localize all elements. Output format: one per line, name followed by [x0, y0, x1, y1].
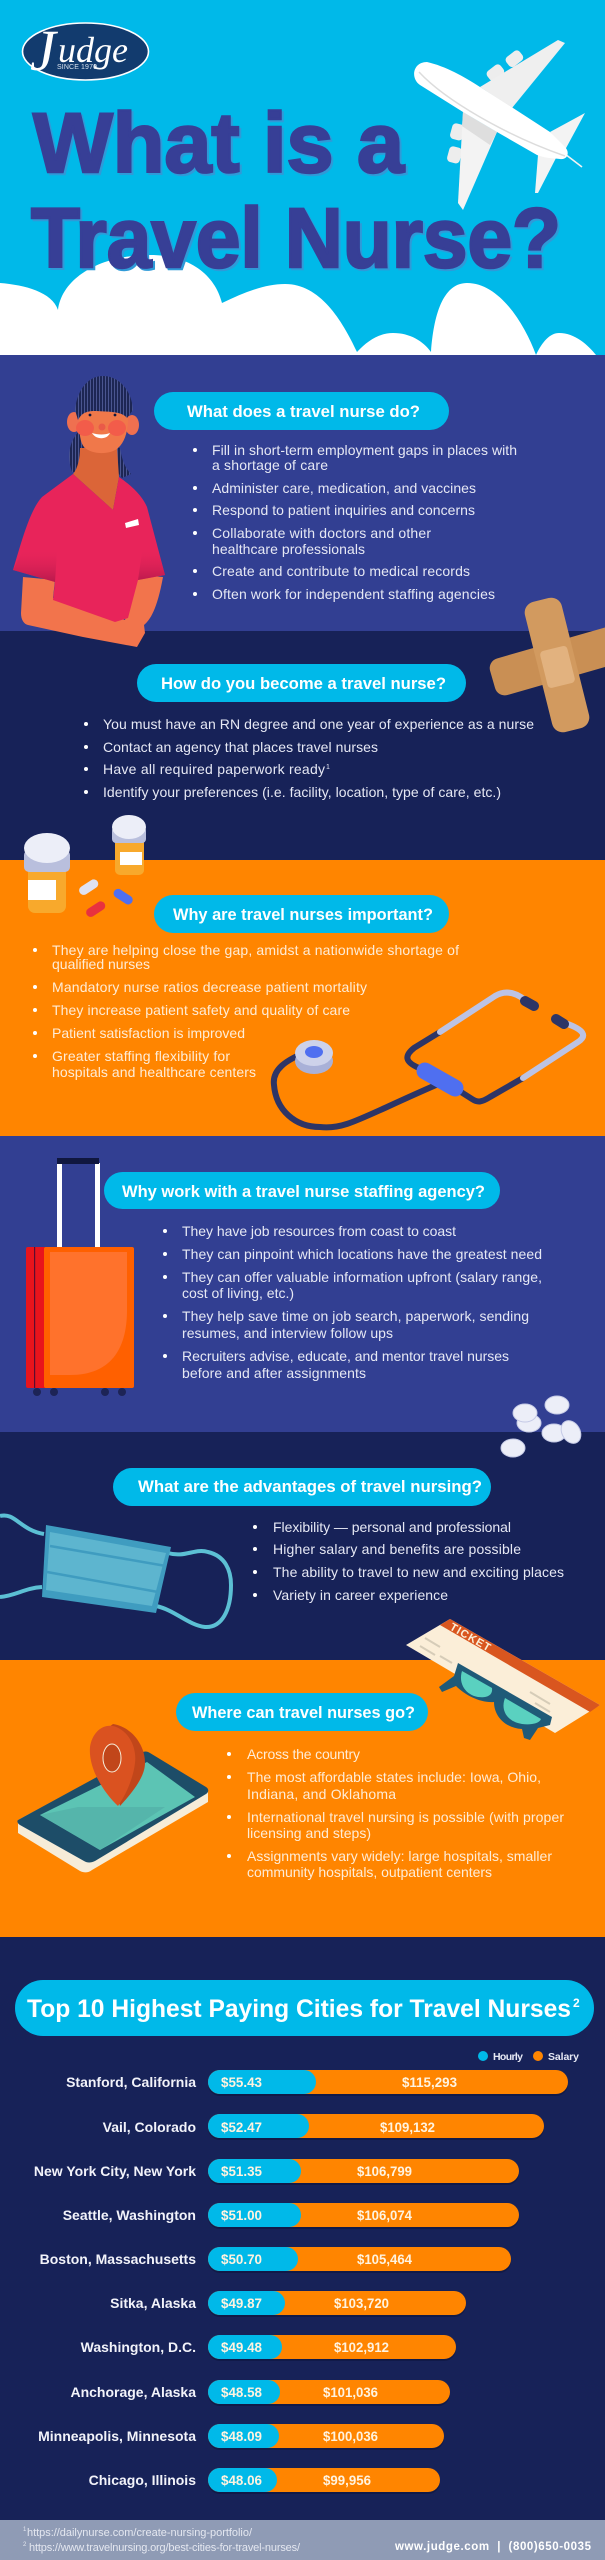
row: Seattle — [63, 2203, 519, 2229]
panel: why work with a staffing agency — [0, 1136, 605, 1432]
bullet list: licensing and steps) — [247, 1825, 371, 1841]
bullet list: community hospitals, outpatient centers — [247, 1864, 492, 1880]
logo: SINCE 1970 — [57, 64, 97, 71]
icon: pill bottles and capsules — [24, 815, 146, 919]
icon: surgical mask — [0, 1515, 231, 1627]
heading: What are the advantages of travel nursing? — [138, 1477, 482, 1496]
row: Stanford — [66, 2070, 568, 2096]
panel: advantages of travel nursing — [0, 1432, 605, 1660]
bullet list: They increase patient safety and quality of care — [52, 1002, 350, 1018]
footnotes: 2 — [23, 2542, 27, 2548]
footnotes — [23, 2527, 301, 2554]
title — [31, 96, 563, 287]
row: Vail: $52.47 — [221, 2120, 262, 2135]
heading: What does a travel nurse do? — [187, 402, 420, 421]
row: Minneapolis — [38, 2424, 444, 2450]
heading — [154, 895, 449, 933]
bullet list — [33, 942, 459, 1080]
row: Boston — [40, 2247, 511, 2273]
row: Washington DC — [81, 2335, 456, 2361]
icon: ticket and sunglasses: TICKET — [448, 1621, 493, 1654]
row: Anchorage: Anchorage, Alaska — [70, 2384, 196, 2400]
heading: How do you become a travel nurse? — [161, 674, 446, 693]
bullet list: Patient satisfaction is improved — [52, 1025, 245, 1041]
logo — [22, 18, 148, 83]
row: Boston: Boston, Massachusetts — [40, 2251, 196, 2267]
bullet list: Flexibility — personal and professional — [273, 1519, 511, 1535]
row: New York City: $51.35 — [221, 2164, 262, 2179]
row: Seattle: $106,074 — [357, 2208, 412, 2223]
heading: Top 10 Highest Paying Cities for Travel Nurses — [27, 1995, 571, 2023]
icon: stethoscope — [274, 993, 583, 1127]
bullet list: hospitals and healthcare centers — [52, 1064, 256, 1080]
bullet list: They can pinpoint which locations have the greatest need — [182, 1246, 542, 1262]
row: New York City: New York City, New York — [34, 2163, 196, 2179]
icon: ticket and sunglasses — [406, 1619, 600, 1740]
legend — [478, 2051, 579, 2063]
bullet list — [193, 442, 517, 602]
clouds — [0, 255, 596, 355]
row: Boston: $50.70 — [221, 2252, 262, 2267]
row: Anchorage: $101,036 — [323, 2385, 378, 2400]
bullet list: They have job resources from coast to coast — [182, 1223, 456, 1239]
bullet list: healthcare professionals — [212, 541, 365, 557]
bullet list: Recruiters advise, educate, and mentor travel nurses — [182, 1348, 509, 1364]
bullet list — [84, 716, 534, 800]
title: What is a — [33, 96, 405, 190]
bullet list: They are helping close the gap, amidst a nationwide shortage of — [52, 942, 459, 958]
bullet list: The most affordable states include: Iowa, Ohio, — [247, 1769, 541, 1785]
row: Anchorage — [70, 2380, 450, 2406]
row: Seattle: Seattle, Washington — [63, 2207, 196, 2223]
panel: what does a travel nurse do — [0, 355, 605, 631]
bullet list: resumes, and interview follow ups — [182, 1325, 393, 1341]
bullet list: Fill in short-term employment gaps in places with — [212, 442, 517, 458]
row: Minneapolis: Minneapolis, Minnesota — [38, 2428, 196, 2444]
row: Washington DC: $49.48 — [221, 2340, 262, 2355]
icon: tablets — [501, 1396, 585, 1457]
bullet list — [163, 1223, 542, 1381]
contact line: www.judge.com | (800)650-0035 — [394, 2541, 592, 2553]
bullet list: Create and contribute to medical records — [212, 563, 470, 579]
legend: Hourly — [493, 2051, 523, 2063]
heading: 2 — [573, 1996, 580, 2010]
bullet list: 1 — [326, 764, 330, 771]
panel: why are travel nurses important — [0, 860, 605, 1136]
title: Travel Nurse? — [31, 191, 561, 285]
heading — [113, 1468, 491, 1506]
bullet list: They can offer valuable information upfront (salary range, — [182, 1269, 542, 1285]
row: Vail — [103, 2114, 544, 2140]
row: Minneapolis: $100,036 — [323, 2429, 378, 2444]
icon: crossed bandages — [487, 595, 605, 735]
title: Travel Nurse? — [33, 193, 563, 287]
panel: where can travel nurses go — [0, 1660, 605, 1937]
row: Chicago — [89, 2468, 440, 2494]
bullet list: Greater staffing flexibility for — [52, 1048, 230, 1064]
footnotes: https://dailynurse.com/create-nursing-portfolio/ — [27, 2527, 253, 2539]
bullet list — [253, 1519, 564, 1603]
row: Vail: Vail, Colorado — [103, 2119, 196, 2135]
bullet list: Mandatory nurse ratios decrease patient mortality — [52, 979, 367, 995]
bullet list: Assignments vary widely: large hospitals, smaller — [247, 1848, 552, 1864]
bullet list: International travel nursing is possible (with proper — [247, 1809, 564, 1825]
bullet list: qualified nurses — [52, 956, 150, 972]
row: Vail: $109,132 — [380, 2120, 435, 2135]
bullet list: a shortage of care — [212, 457, 328, 473]
row: Chicago: $48.06 — [221, 2473, 262, 2488]
bullet list: Indiana, and Oklahoma — [247, 1786, 396, 1802]
bullet list — [227, 1746, 564, 1880]
row: Sitka: $103,720 — [334, 2296, 389, 2311]
bullet list: Collaborate with doctors and other — [212, 525, 431, 541]
panel: top 10 highest paying cities — [0, 1937, 605, 2520]
row: Sitka: Sitka, Alaska — [110, 2295, 196, 2311]
footer — [0, 2520, 605, 2560]
row: Stanford: Stanford, California — [66, 2074, 196, 2090]
heading: Where can travel nurses go? — [192, 1703, 415, 1722]
bullet list: Across the country — [247, 1746, 360, 1762]
heading: Why are travel nurses important? — [173, 905, 433, 924]
bullet list: Administer care, medication, and vaccines — [212, 480, 476, 496]
bullet list: before and after assignments — [182, 1365, 366, 1381]
logo: udge — [58, 30, 128, 70]
title: What is a — [35, 98, 407, 192]
row: Chicago: $99,956 — [323, 2473, 371, 2488]
logo: J — [30, 18, 59, 83]
bullet list: Often work for independent staffing agencies — [212, 586, 495, 602]
row: Washington DC: Washington, D.C. — [81, 2339, 196, 2355]
bullet list: The ability to travel to new and exciting places — [273, 1564, 564, 1580]
icon: nurse — [13, 376, 165, 647]
row: Seattle: $51.00 — [221, 2208, 262, 2223]
row: Stanford: $115,293 — [402, 2075, 457, 2090]
row: New York City — [34, 2159, 519, 2185]
row: Chicago: Chicago, Illinois — [89, 2472, 196, 2488]
row: Washington DC: $102,912 — [334, 2340, 389, 2355]
row: Stanford: $55.43 — [221, 2075, 262, 2090]
footnotes: 1 — [23, 2527, 27, 2533]
icon: phone with map pin — [17, 1724, 208, 1872]
bullet list: Higher salary and benefits are possible — [273, 1541, 521, 1557]
bullet list: cost of living, etc.) — [182, 1285, 294, 1301]
heading — [104, 1172, 500, 1209]
bullet list: Respond to patient inquiries and concerns — [212, 502, 475, 518]
heading — [15, 1980, 594, 2036]
bullet list: You must have an RN degree and one year of experience as a nurse — [103, 716, 534, 732]
row: Sitka: $49.87 — [221, 2296, 262, 2311]
row: New York City: $106,799 — [357, 2164, 412, 2179]
row: Anchorage: $48.58 — [221, 2385, 262, 2400]
icon: airplane — [414, 40, 585, 210]
bullet list: Identify your preferences (i.e. facility, location, type of care, etc.) — [103, 784, 501, 800]
icon: suitcase — [26, 1158, 134, 1396]
heading — [176, 1693, 428, 1731]
legend: Salary — [548, 2051, 579, 2063]
row: Sitka — [110, 2291, 466, 2317]
bullet list: They help save time on job search, paperwork, sending — [182, 1308, 529, 1324]
panel: hero — [0, 0, 605, 355]
heading: Why work with a travel nurse staffing agency? — [122, 1182, 485, 1201]
row: Minneapolis: $48.09 — [221, 2429, 262, 2444]
footnotes: https://www.travelnursing.org/best-cities-for-travel-nurses/ — [29, 2542, 301, 2554]
bullet list: Have all required paperwork ready — [103, 761, 325, 777]
heading — [154, 392, 449, 430]
bar chart — [34, 2070, 568, 2494]
heading — [137, 664, 466, 702]
row: Boston: $105,464 — [357, 2252, 412, 2267]
panel: how do you become a travel nurse — [0, 631, 605, 860]
bullet list: Variety in career experience — [273, 1587, 448, 1603]
bullet list: Contact an agency that places travel nurses — [103, 739, 378, 755]
